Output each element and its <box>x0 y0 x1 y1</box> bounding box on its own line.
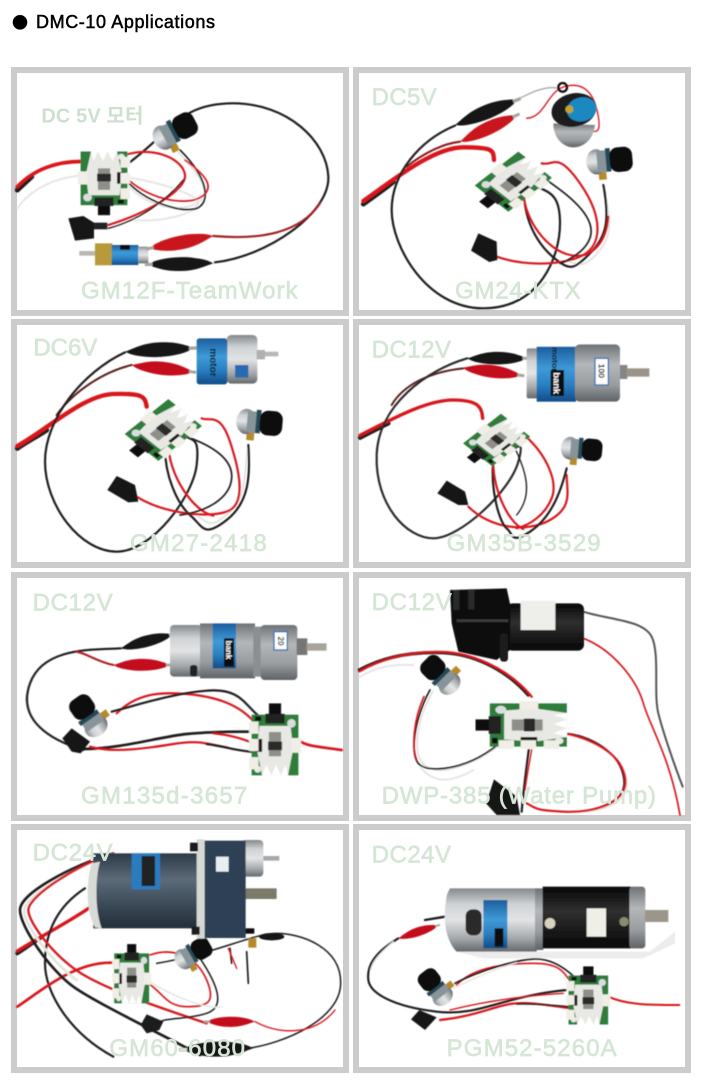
panel: DC12V GM35B-3529 <box>356 322 688 565</box>
photo: motor and controller wiring: 20 <box>276 637 285 646</box>
model label: PGM52-5260A <box>447 1035 617 1062</box>
panel frame <box>356 70 688 313</box>
bullet dot <box>13 15 27 30</box>
photo: motor and controller wiring: bank <box>551 372 561 395</box>
photo: pump and controller wiring <box>359 588 683 815</box>
voltage label: DC12V <box>372 336 451 363</box>
panel: DC24V GM60-6080 <box>14 827 346 1070</box>
voltage label: DC24V <box>372 841 451 868</box>
panel: DC5V GM24-KTX <box>356 70 688 313</box>
panel frame <box>14 827 346 1070</box>
panel: DC12V GM135d-3657 <box>14 575 346 818</box>
photo: motor and controller wiring: motor <box>550 347 560 372</box>
model label: GM24-KTX <box>455 277 581 304</box>
panel frame <box>14 70 346 313</box>
photo: motor and controller wiring <box>17 839 341 1062</box>
photo: motor and controller wiring: 100 <box>597 364 607 378</box>
panel frame <box>14 575 346 818</box>
voltage label: DC12V <box>33 590 113 617</box>
model label: GM135d-3657 <box>81 782 247 809</box>
photo: motor and controller wiring <box>17 335 284 557</box>
photo: motor and controller wiring: bank <box>224 641 233 660</box>
panel: DC6V GM27-2418 <box>14 322 346 565</box>
panel frame <box>14 322 346 565</box>
photo: motor and controller wiring <box>360 336 649 557</box>
model label: DWP-385 (Water Pump) <box>382 782 656 809</box>
photo: motor and controller wiring <box>27 590 342 809</box>
model label: GM60-6080 <box>109 1035 245 1062</box>
photo: motor and controller wiring <box>368 841 679 1062</box>
model label: GM35B-3529 <box>447 530 601 557</box>
voltage label: DC6V <box>33 335 97 362</box>
voltage label: DC12V <box>372 589 452 616</box>
panel frame <box>356 575 688 818</box>
voltage label: DC 5V 모터 <box>41 105 143 128</box>
panel: DC 5V GM12F-TeamWork <box>14 70 346 313</box>
photo: motor and controller wiring <box>363 83 634 308</box>
model label: GM12F-TeamWork <box>81 277 299 304</box>
panel: DC24V PGM52-5260A <box>356 827 688 1070</box>
model label: GM27-2418 <box>130 530 267 557</box>
panel: DC12V DWP-385 Water Pump <box>356 575 688 818</box>
title: DMC-10 Applications <box>36 12 215 32</box>
panel frame <box>356 322 688 565</box>
voltage label: DC5V <box>372 84 437 111</box>
voltage label: DC24V <box>33 840 113 867</box>
panel frame <box>356 827 688 1070</box>
photo: motor and controller wiring: motor <box>207 348 218 377</box>
photo: motor and controller wiring <box>17 103 328 304</box>
